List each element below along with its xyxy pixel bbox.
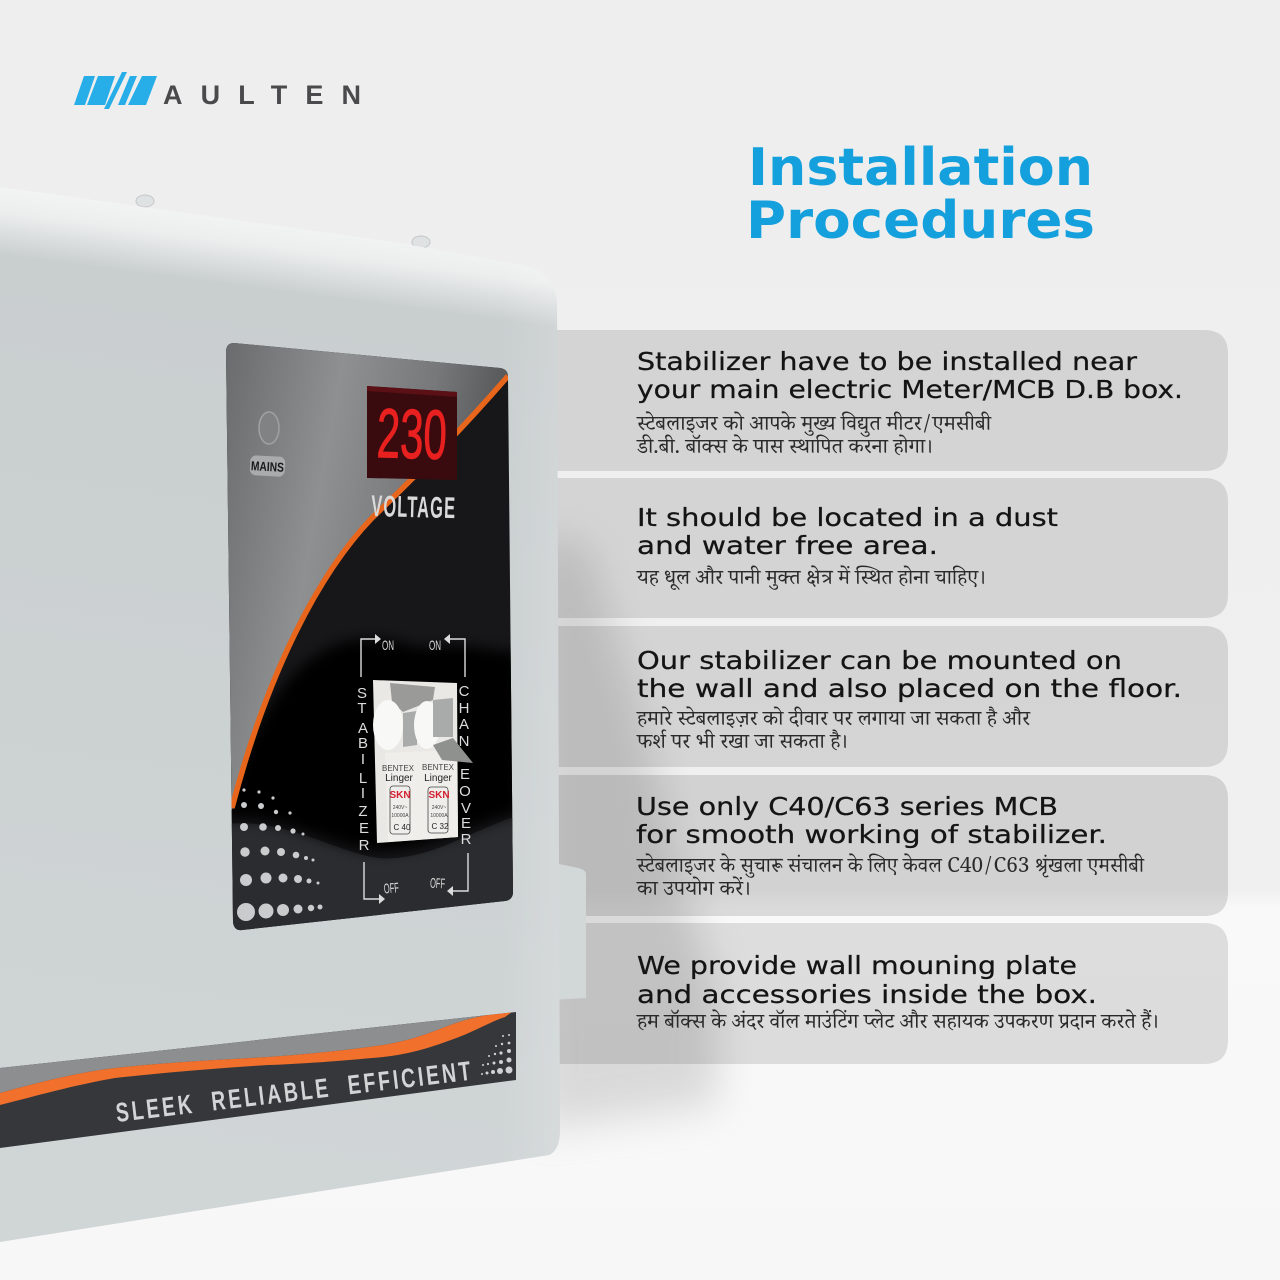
on off labels: OFF — [383, 879, 399, 897]
gray band strip — [0, 1012, 516, 1093]
breaker labels right: C 32 — [432, 822, 449, 831]
stabilizer vertical label: T — [357, 700, 367, 717]
step 2 English text: It should be located in a dust — [637, 503, 1058, 532]
step 2 English text: and water free area. — [637, 531, 938, 560]
voltage label: VOLTAGE — [371, 490, 457, 526]
digital voltage display: 230 — [376, 394, 448, 474]
panel: step 4 — [557, 775, 1228, 916]
mains label: MAINS — [251, 458, 285, 475]
LED indicator — [259, 412, 279, 444]
step 5 English text: and accessories inside the box. — [637, 980, 1097, 1009]
step 3 Hindi text — [636, 706, 1031, 762]
breaker labels right: 240V~ — [432, 805, 446, 811]
step 2 English text — [637, 503, 1058, 560]
stabilizer vertical label: A — [358, 720, 368, 737]
panel: step 1 — [557, 330, 1228, 471]
logo icon: blue stripes — [74, 72, 157, 109]
stabilizer vertical label: R — [359, 837, 370, 854]
changeover vertical label: N — [459, 733, 469, 750]
stabilizer vertical label: S — [357, 685, 367, 702]
panel: step 2 — [557, 478, 1228, 618]
stabilizer vertical label: L — [359, 770, 367, 787]
changeover vertical label: V — [461, 800, 471, 817]
step 4 English text: Use only C40/C63 series MCB — [636, 792, 1058, 821]
stabilizer vertical label: I — [361, 751, 365, 768]
changeover vertical label: A — [459, 716, 469, 733]
breaker labels right: SKN — [428, 790, 450, 801]
breaker labels left: 10000A — [391, 813, 409, 819]
step 1 Hindi text: स्टेबलाइजर को आपके मुख्य विद्युत मीटर/एमसीबी — [636, 411, 992, 444]
orange swoosh — [232, 376, 508, 808]
breaker labels right: 10000A — [430, 813, 448, 819]
on off labels: ON — [429, 637, 441, 653]
step 1 English text — [637, 347, 1183, 404]
control face panel — [220, 340, 520, 940]
step 4 Hindi text: का उपयोग करें। — [636, 876, 751, 909]
step 1 Hindi text — [636, 411, 992, 467]
step 1 Hindi text: डी.बी. बॉक्स के पास स्थापित करना होगा। — [636, 434, 933, 467]
mounting bracket — [550, 862, 586, 1000]
changeover vertical label — [459, 683, 472, 848]
breaker labels left: BENTEX — [382, 764, 415, 773]
panel: step 5 — [557, 923, 1228, 1064]
breaker labels left — [382, 764, 415, 834]
step 3 English text: the wall and also placed on the floor. — [637, 674, 1182, 703]
step 4 English text — [636, 792, 1107, 849]
changeover vertical label: C — [459, 683, 470, 700]
stabilizer vertical label: Z — [358, 803, 368, 820]
breaker switch — [373, 680, 473, 843]
logo: Aulten — [74, 72, 361, 110]
band dots — [481, 1034, 512, 1075]
bottom slogan band — [0, 1012, 516, 1148]
gray textured area — [220, 340, 512, 820]
changeover vertical label: E — [461, 815, 471, 832]
step 1 English text: Stabilizer have to be installed near — [637, 347, 1138, 376]
logo wordmark: AULTEN — [163, 80, 361, 110]
mounting screws — [136, 195, 430, 248]
step 3 English text — [637, 646, 1182, 703]
step 3 Hindi text: फर्श पर भी रखा जा सकता है। — [636, 729, 848, 762]
breaker labels left: Linger — [385, 773, 414, 784]
step 3 Hindi text: हमारे स्टेबलाइज़र को दीवार पर लगाया जा सकता है और — [636, 706, 1031, 739]
stabilizer vertical label: B — [358, 735, 368, 752]
on off labels — [382, 637, 446, 897]
orange band swoosh — [0, 1012, 512, 1105]
breaker labels left: C 40 — [394, 823, 411, 832]
step 4 English text: for smooth working of stabilizer. — [636, 820, 1107, 849]
breaker labels left: SKN — [389, 790, 411, 801]
changeover vertical label: E — [460, 766, 470, 783]
changeover vertical label: O — [459, 783, 471, 800]
step 2 Hindi text: यह धूल और पानी मुक्त क्षेत्र में स्थित होना चाहिए। — [636, 565, 986, 598]
on off labels: ON — [382, 637, 394, 653]
stabilizer vertical label: I — [361, 785, 365, 802]
step 5 English text — [637, 951, 1097, 1009]
switch arrows — [361, 634, 468, 904]
on off labels: OFF — [430, 875, 446, 891]
breaker labels right: BENTEX — [422, 763, 455, 772]
breaker labels left: 240V~ — [393, 805, 407, 811]
lower glossy gray area — [232, 818, 513, 930]
breaker labels right: Linger — [424, 773, 453, 784]
breaker labels right — [422, 763, 455, 833]
changeover vertical label: H — [459, 700, 469, 717]
device body — [0, 187, 560, 1242]
stabilizer vertical label: E — [359, 820, 369, 837]
glossy black reflection — [225, 639, 520, 852]
step 5 Hindi text: हम बॉक्स के अंदर वॉल माउंटिंग प्लेट और सहायक उपकरण प्रदान करते हैं। — [636, 1009, 1159, 1042]
digital voltage display — [367, 386, 457, 480]
stabilizer device — [0, 187, 586, 1242]
stabilizer vertical label — [357, 685, 370, 854]
panel: step 3 — [557, 626, 1228, 767]
title: Procedures — [746, 191, 1095, 251]
step 5 English text: We provide wall mouning plate — [637, 951, 1077, 980]
step 3 English text: Our stabilizer can be mounted on — [637, 646, 1122, 675]
changeover vertical label: R — [461, 831, 472, 848]
title: Installation — [748, 138, 1093, 198]
mains label — [249, 455, 285, 477]
step 4 Hindi text: स्टेबलाइजर के सुचारू संचालन के लिए केवल C40/C63 श्रृंखला एमसीबी — [636, 853, 1145, 886]
step 4 Hindi text — [636, 853, 1145, 909]
title — [746, 138, 1095, 251]
step 1 English text: your main electric Meter/MCB D.B box. — [637, 375, 1183, 404]
decorative dot matrix — [237, 788, 322, 921]
slogan text: SLEEK RELIABLE EFFICIENT — [114, 1056, 473, 1128]
